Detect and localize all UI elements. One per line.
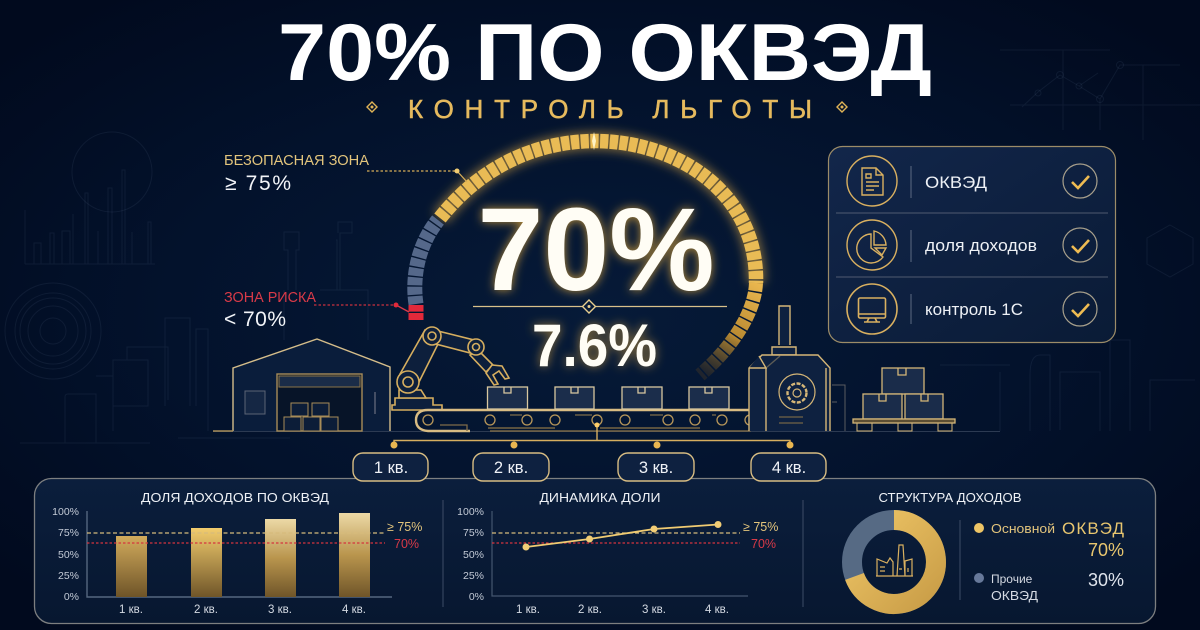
line chart: динамика доли: 4 кв.	[705, 604, 729, 616]
big number 70%: 70%	[478, 184, 714, 316]
quarter pills: 4 кв.	[772, 459, 806, 477]
background decoration: faint line drawings	[5, 50, 1200, 443]
panel: bottom charts	[34, 478, 1156, 624]
icon: check 1	[1063, 164, 1097, 198]
label: risk zone: ЗОНА РИСКА	[224, 289, 316, 306]
pallet with boxes	[853, 368, 955, 431]
label: risk zone: < 70%	[224, 308, 286, 331]
bar chart: доля доходов: ≥ 75%	[387, 520, 422, 534]
line chart: динамика доли: 75%	[463, 527, 484, 539]
line chart: динамика доли: 1 кв.	[516, 604, 540, 616]
bar chart: доля доходов: 4 кв.	[342, 604, 366, 616]
gauge: risk zone segments	[408, 305, 424, 320]
line chart: динамика доли: 100%	[457, 506, 484, 518]
donut legend: 70%	[1088, 540, 1124, 560]
ground line	[213, 430, 1000, 432]
big number 70%: 70%	[478, 184, 714, 316]
quarter pills	[353, 453, 826, 481]
conveyor belt	[416, 410, 770, 431]
bar chart: доля доходов: 70%	[394, 537, 419, 551]
line chart: динамика доли: 3 кв.	[642, 604, 666, 616]
gauge divider	[473, 300, 727, 313]
line chart: динамика доли: 0%	[469, 591, 484, 603]
label: safe zone: ≥ 75%	[225, 172, 291, 195]
conveyor boxes	[488, 387, 729, 409]
bar chart: доля доходов: 75%	[58, 527, 79, 539]
donut chart: структура доходов: СТРУКТУРА ДОХОДОВ	[878, 490, 1022, 505]
text: ОКВЭД: ОКВЭД	[925, 173, 988, 192]
bar chart: доля доходов: 25%	[58, 570, 79, 582]
timeline connector	[390, 422, 794, 448]
quarter pills: 2 кв.	[494, 459, 528, 477]
line chart: динамика доли: ДИНАМИКА ДОЛИ	[540, 490, 660, 505]
quarter pills: 3 кв.	[639, 459, 673, 477]
secondary number 7.6%: 7.6%	[532, 312, 657, 379]
gauge: grey segments	[415, 220, 438, 304]
line chart: динамика доли: 2 кв.	[578, 604, 602, 616]
title: 70% ПО ОКВЭД	[278, 8, 932, 98]
line chart: динамика доли: 25%	[463, 570, 484, 582]
subtitle	[245, 94, 965, 124]
bar chart: доля доходов: 100%	[52, 506, 79, 518]
warehouse	[213, 339, 390, 431]
icon: pie chart	[847, 220, 897, 270]
icon: check 2	[1063, 228, 1097, 262]
text: доля доходов: доля доходов	[925, 236, 1037, 255]
bar chart: доля доходов: 50%	[58, 549, 79, 561]
line chart: динамика доли: 50%	[463, 549, 484, 561]
subtitle: КОНТРОЛЬ ЛЬГОТЫ	[408, 94, 812, 124]
line chart: динамика доли	[457, 490, 778, 616]
machine with chimney and gear	[749, 306, 845, 431]
donut legend: ОКВЭД	[1062, 519, 1124, 538]
panel: checklist	[828, 146, 1116, 342]
bar chart: доля доходов	[52, 490, 422, 616]
label: safe zone	[224, 152, 467, 195]
icon: document	[847, 156, 897, 206]
icon: monitor	[847, 284, 897, 334]
text: контроль 1С: контроль 1С	[925, 300, 1023, 319]
gauge: gold segments	[440, 141, 756, 283]
label: safe zone: БЕЗОПАСНАЯ ЗОНА	[224, 152, 369, 169]
robot arm	[392, 327, 509, 410]
quarter pills: 1 кв.	[374, 459, 408, 477]
gauge: fading tail	[700, 283, 756, 375]
bar chart: доля доходов: 2 кв.	[194, 604, 218, 616]
donut legend: ОКВЭД	[991, 588, 1038, 603]
donut chart: структура доходов	[852, 490, 1022, 604]
bar chart: доля доходов: 1 кв.	[119, 604, 143, 616]
icon: check 3	[1063, 292, 1097, 326]
bar chart: доля доходов: 3 кв.	[268, 604, 292, 616]
donut legend: Основной	[991, 521, 1055, 536]
gauge arc	[415, 132, 756, 375]
icon: gear	[779, 374, 815, 410]
donut legend	[960, 519, 1124, 603]
line chart: динамика доли: ≥ 75%	[743, 520, 778, 534]
secondary number 7.6%: 7.6%	[532, 312, 657, 379]
line chart: динамика доли: 70%	[751, 537, 776, 551]
label: risk zone	[224, 289, 409, 331]
icon: factory	[876, 545, 913, 576]
bar chart: доля доходов: 0%	[64, 591, 79, 603]
donut legend: 30%	[1088, 570, 1124, 590]
bar chart: доля доходов: ДОЛЯ ДОХОДОВ ПО ОКВЭД	[141, 490, 329, 505]
donut legend: Прочие	[991, 572, 1033, 586]
